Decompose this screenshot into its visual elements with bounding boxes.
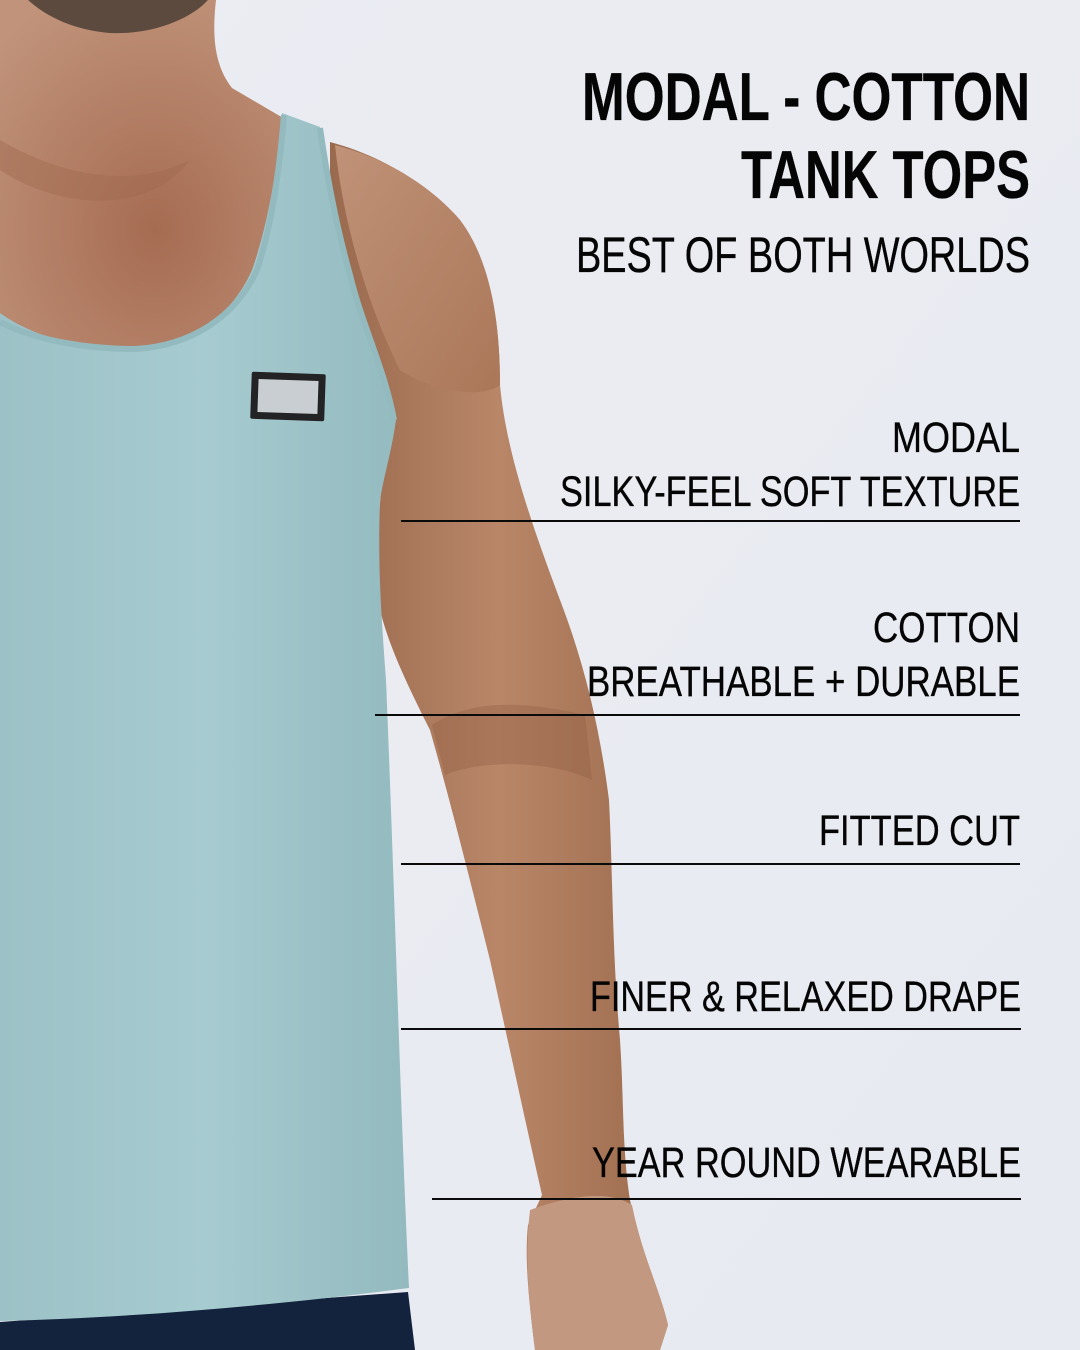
model photo illustration <box>0 0 668 1350</box>
feature: cotton: COTTON <box>873 604 1020 652</box>
shoulder highlight <box>335 145 500 392</box>
forearm shadow <box>432 705 592 780</box>
neck and chest skin <box>0 0 310 370</box>
hand <box>527 1196 668 1350</box>
title <box>582 59 1030 213</box>
chest logo badge <box>250 372 326 421</box>
arm and shoulder skin <box>330 142 668 1350</box>
feature: cotton <box>375 604 1020 716</box>
tank top <box>0 113 409 1321</box>
beard <box>28 0 208 33</box>
feature: modal <box>401 414 1020 522</box>
feature: modal: MODAL <box>892 414 1020 462</box>
feature: fitted cut: FITTED CUT <box>819 807 1020 855</box>
neck crease shadow <box>0 140 190 201</box>
strap trim <box>0 115 394 420</box>
navy shorts <box>0 1292 415 1350</box>
